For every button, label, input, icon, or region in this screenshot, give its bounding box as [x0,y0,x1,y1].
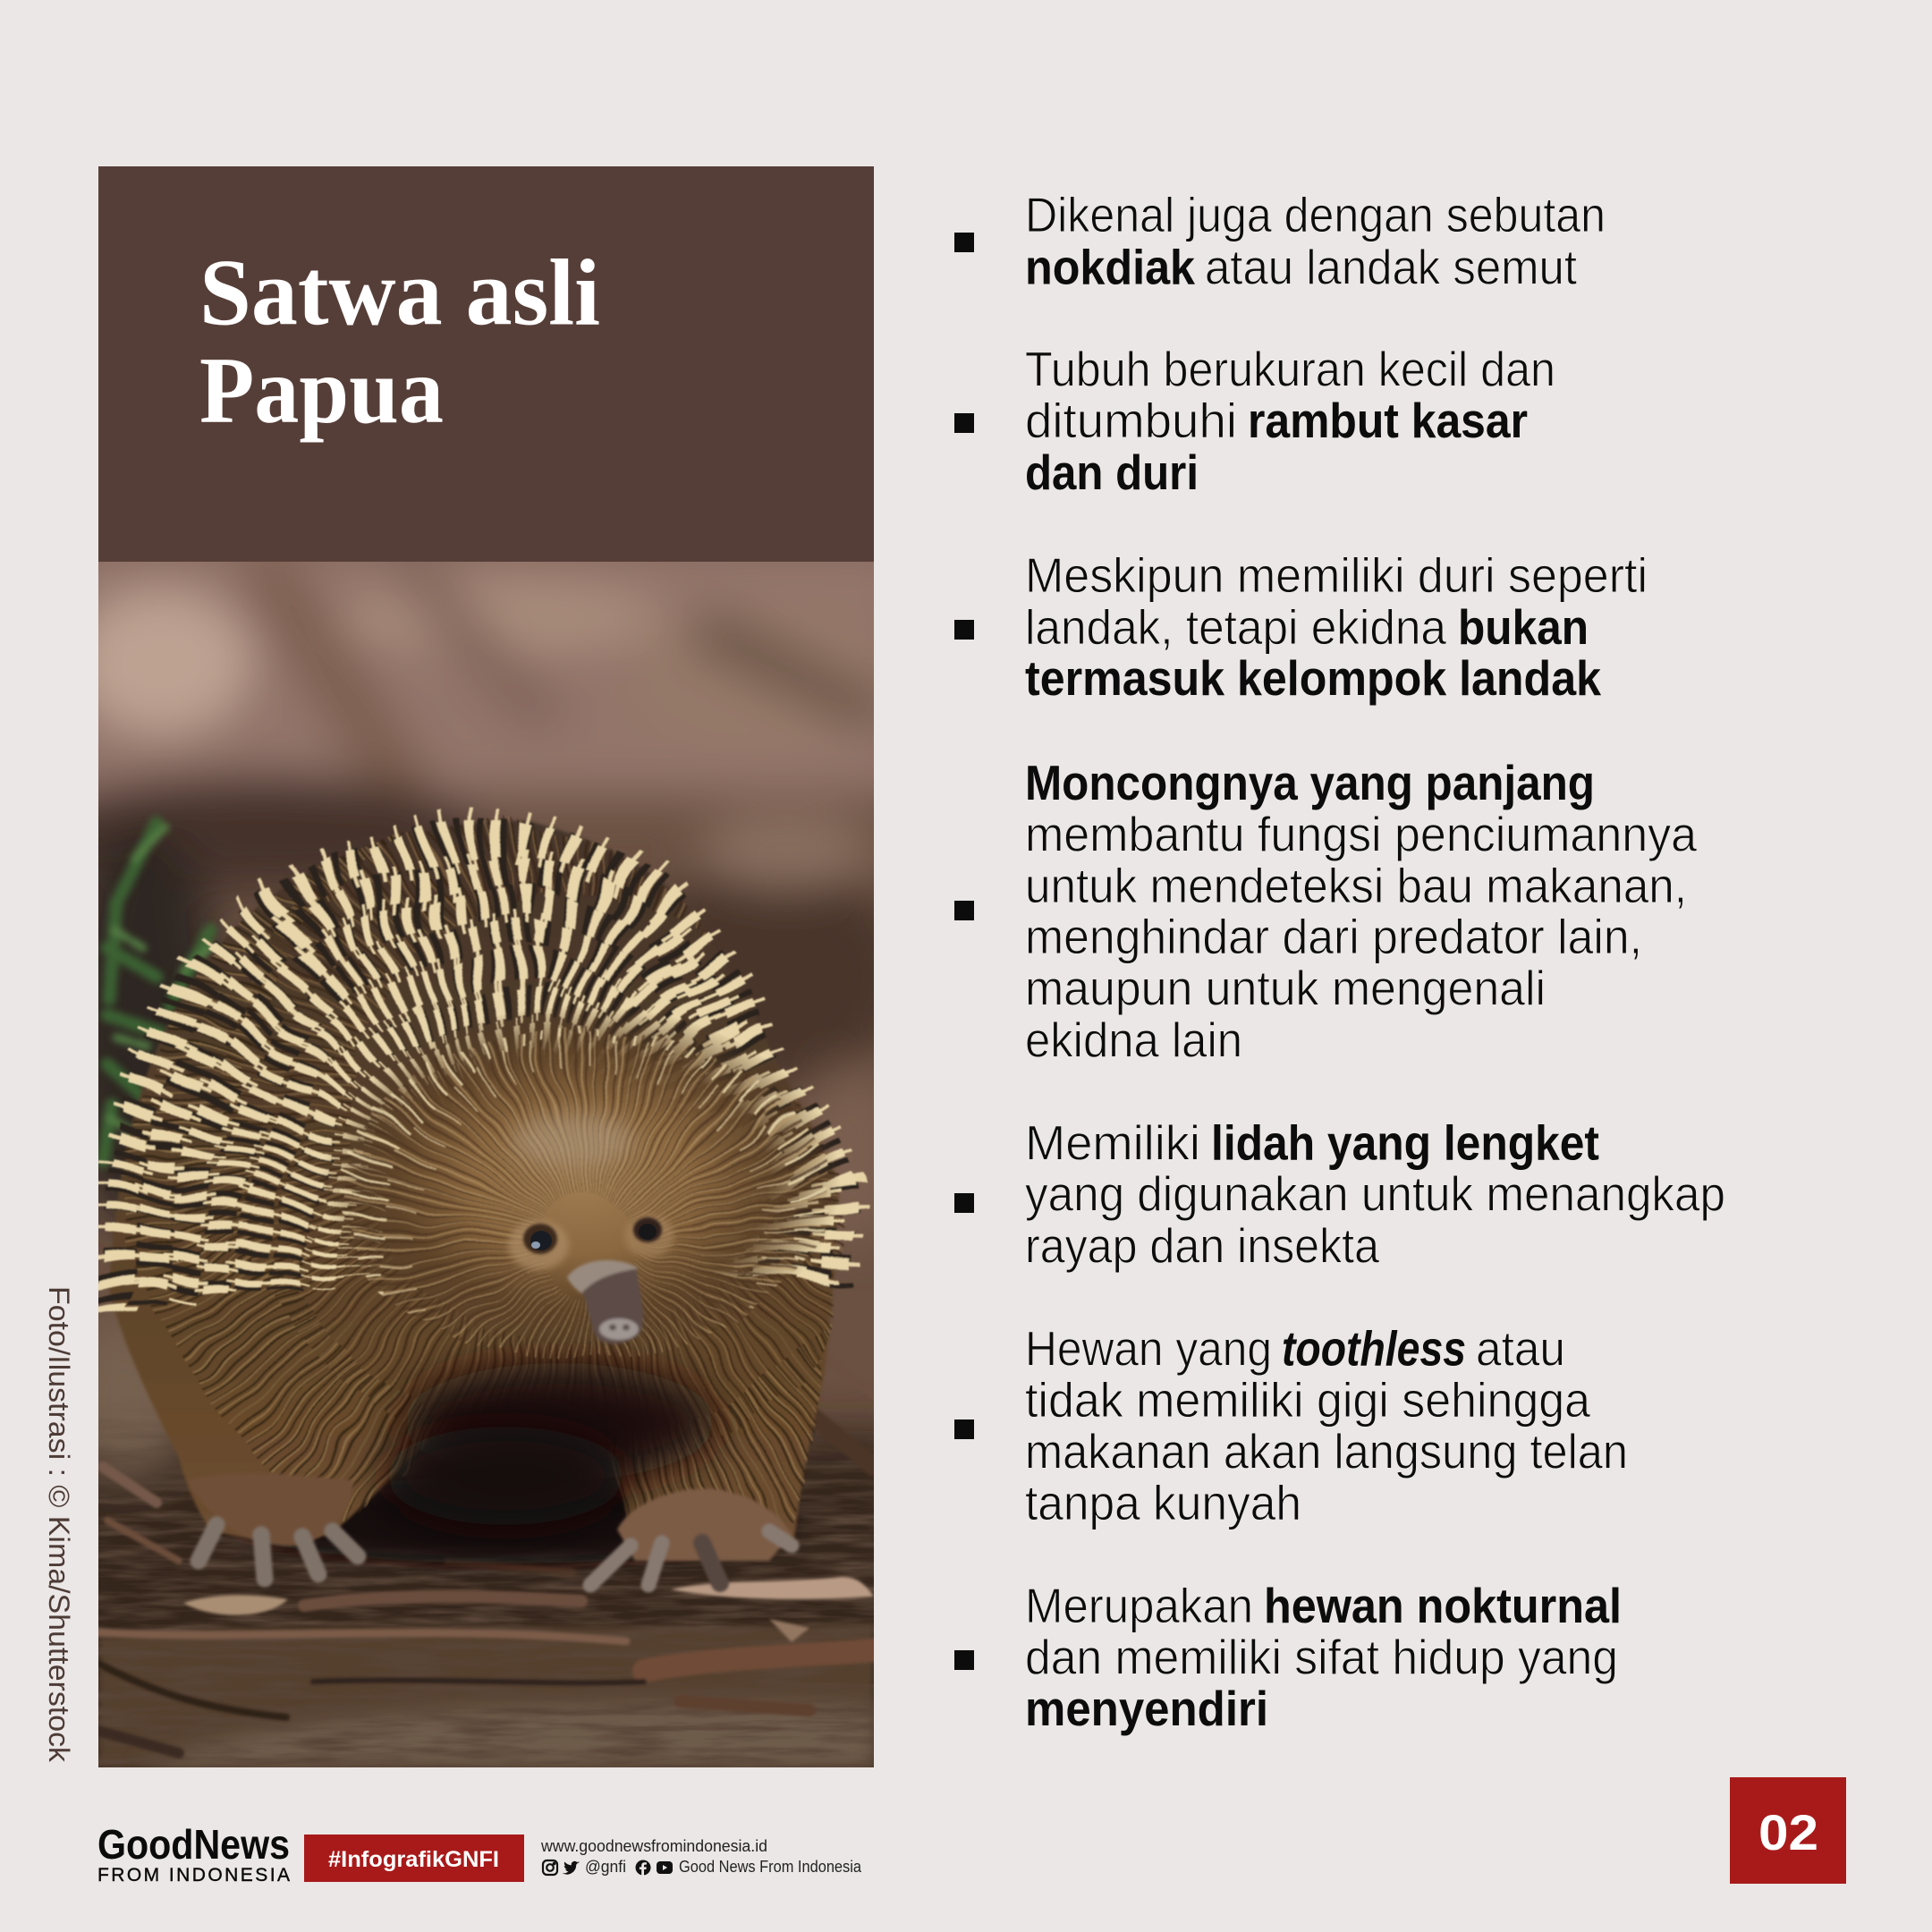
photo credit: Foto/Ilustrasi : © Kima/Shutterstock [43,1286,75,1763]
plant on the left [103,823,210,1163]
fact 4: moncong: membantu fungsi penciumannya [1025,807,1697,862]
icon: instagram [543,1860,557,1875]
hashtag badge: #InfografikGNFI [328,1847,499,1872]
fact 5: lidah lengket: Memiliki [1025,1114,1200,1170]
fact 4: moncong: menghindar dari predator lain, [1025,909,1642,964]
icon: facebook [635,1860,651,1876]
fact 6: toothless: tidak memiliki gigi sehingga [1025,1372,1590,1428]
icon: youtube [657,1861,673,1874]
fact 6: toothless: makanan akan langsung telan [1025,1424,1628,1479]
fact 7: nokturnal: dan memiliki sifat hidup yang [1025,1630,1618,1685]
fur on lower body [122,816,845,1524]
fact 2: rambut kasar [954,342,1555,500]
fact 4: moncong: ekidna lain [1025,1013,1242,1068]
fact 1: nokdiak: Dikenal juga dengan sebutan [1025,187,1606,242]
footer logo: GoodNews from Indonesia [97,1821,290,1885]
fact 6: toothless: toothless [1282,1320,1466,1376]
page number badge: 02 [1758,1804,1818,1860]
cream quills, thick middle part [112,835,837,1313]
fact 3: bukan landak: landak, tetapi ekidna [1025,599,1446,655]
panel: photo of an echidna [98,562,874,1767]
eyes [523,1217,662,1254]
snout [567,1260,643,1343]
fact 5: lidah lengket [954,1114,1725,1274]
fact 2: rambut kasar: Tubuh berukuran kecil dan [1025,342,1555,397]
fact 1: nokdiak: nokdiak [1025,240,1195,295]
fact 4: moncong: maupun untuk mengenali [1025,961,1546,1016]
fact 6: toothless [954,1320,1628,1530]
fact 1: nokdiak: atau landak semut [1205,240,1577,295]
fact 4: moncong [954,755,1697,1068]
website and social handles: Good News From Indonesia [679,1858,862,1876]
fact 7: nokturnal [954,1578,1622,1736]
page number badge [1730,1777,1846,1884]
website and social handles: www.goodnewsfromindonesia.id [540,1837,767,1855]
blurred forest floor background [98,562,874,1767]
shadow under the belly [402,1363,716,1481]
quills [112,835,837,1313]
fact 2: rambut kasar: dan duri [1025,445,1199,500]
fact 3: bukan landak: Meskipun memiliki duri seperti [1025,547,1648,603]
fact 6: toothless: Hewan yang [1025,1320,1272,1376]
heading panel [98,166,874,562]
fact 3: bukan landak [954,547,1648,706]
fact 7: nokturnal: menyendiri [1025,1681,1268,1736]
head [326,1007,837,1360]
fact 2: rambut kasar: rambut kasar [1248,393,1528,448]
footer logo: GoodNews from Indonesia: GoodNews [97,1821,290,1868]
fact 6: toothless: tanpa kunyah [1025,1475,1301,1530]
list of facts [954,187,1725,1736]
fact 5: lidah lengket: rayap dan insekta [1025,1218,1379,1274]
icon: twitter [562,1861,580,1875]
fact 1: nokdiak [954,187,1606,295]
fact 2: rambut kasar: ditumbuhi [1025,393,1237,448]
dry leaves [671,1577,874,1599]
footer logo: GoodNews from Indonesia: FROM INDONESIA [97,1865,290,1885]
fact 5: lidah lengket: yang digunakan untuk menangkap [1025,1166,1725,1222]
legs and feet [188,1473,792,1585]
dark quills [112,835,837,1313]
fact 7: nokturnal: Merupakan [1025,1578,1253,1633]
hashtag badge [304,1835,524,1882]
fact 5: lidah lengket: lidah yang lengket [1211,1114,1599,1170]
ground and bark [98,1409,874,1767]
fact 3: bukan landak: bukan [1458,599,1589,655]
website and social handles: @gnfi [585,1858,626,1876]
fact 6: toothless: atau [1476,1320,1565,1376]
cream quills, thin long part [112,835,837,1313]
website and social handles [540,1837,862,1876]
fact 4: moncong: Moncongnya yang panjang [1025,755,1595,810]
title: Papua [199,338,444,443]
fact 3: bukan landak: termasuk kelompok landak [1025,650,1601,706]
echidna body [98,807,871,1594]
fact 4: moncong: untuk mendeteksi bau makanan, [1025,858,1687,913]
title: Satwa asli [199,240,600,345]
title [199,240,600,443]
fact 7: nokturnal: hewan nokturnal [1264,1578,1622,1633]
